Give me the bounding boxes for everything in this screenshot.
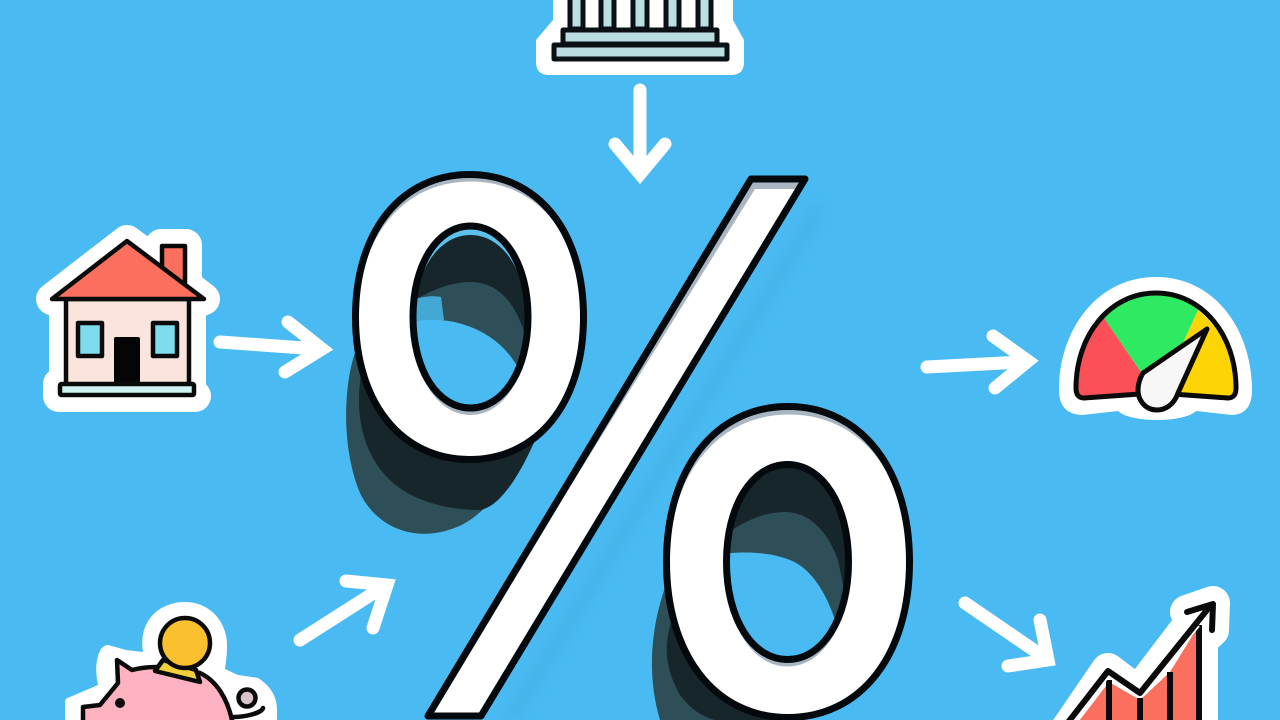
piggy sticker outline [65, 602, 277, 720]
coin slot [155, 660, 200, 682]
gauge red zone [1076, 315, 1145, 398]
arrow: bank to percent [615, 90, 665, 174]
house base [60, 384, 194, 395]
shadow of upper zero [346, 340, 536, 534]
arrow: house to percent [220, 322, 322, 372]
pig eye [115, 698, 125, 708]
trend arrow [1066, 604, 1213, 720]
gauge needle [1138, 329, 1207, 410]
upper zero [356, 174, 584, 466]
arrow: piggy bank to percent [300, 581, 387, 640]
icon: house [52, 241, 204, 396]
chart sticker outline [1067, 603, 1213, 720]
pig tail [234, 690, 263, 717]
chimney [162, 246, 185, 286]
arrow: percent to gauge [927, 336, 1028, 388]
lower zero counter with shadow [730, 468, 845, 656]
house sticker outline [52, 241, 204, 396]
door [114, 337, 140, 385]
bank columns [570, 0, 711, 29]
shadow of lower zero [652, 570, 790, 720]
icon: gauge [1059, 277, 1252, 420]
slash [422, 179, 812, 720]
white gap under trend line [1072, 626, 1199, 720]
right window [153, 323, 177, 356]
gauge yellow zone [1170, 310, 1236, 398]
icon: growth chart [1066, 603, 1213, 720]
gauge outline [1076, 293, 1236, 398]
bar separators [1109, 625, 1199, 720]
bank steps [554, 30, 727, 59]
bank sticker outline [536, 0, 744, 75]
gauge green zone [1102, 293, 1198, 378]
upper zero counter with shadow [416, 230, 524, 404]
gauge sticker outline [1059, 277, 1252, 420]
left window [78, 323, 102, 356]
icon: bank building [536, 0, 744, 75]
lower zero [666, 406, 910, 720]
soft shadow of slash [500, 200, 826, 720]
walls [66, 299, 189, 385]
chart bars [1076, 625, 1199, 720]
roof [52, 241, 204, 299]
coin [160, 618, 210, 668]
percent symbol [346, 174, 910, 720]
arrow: percent to growth chart [965, 603, 1048, 666]
pig body [83, 660, 233, 720]
icon: piggy bank [65, 602, 277, 720]
